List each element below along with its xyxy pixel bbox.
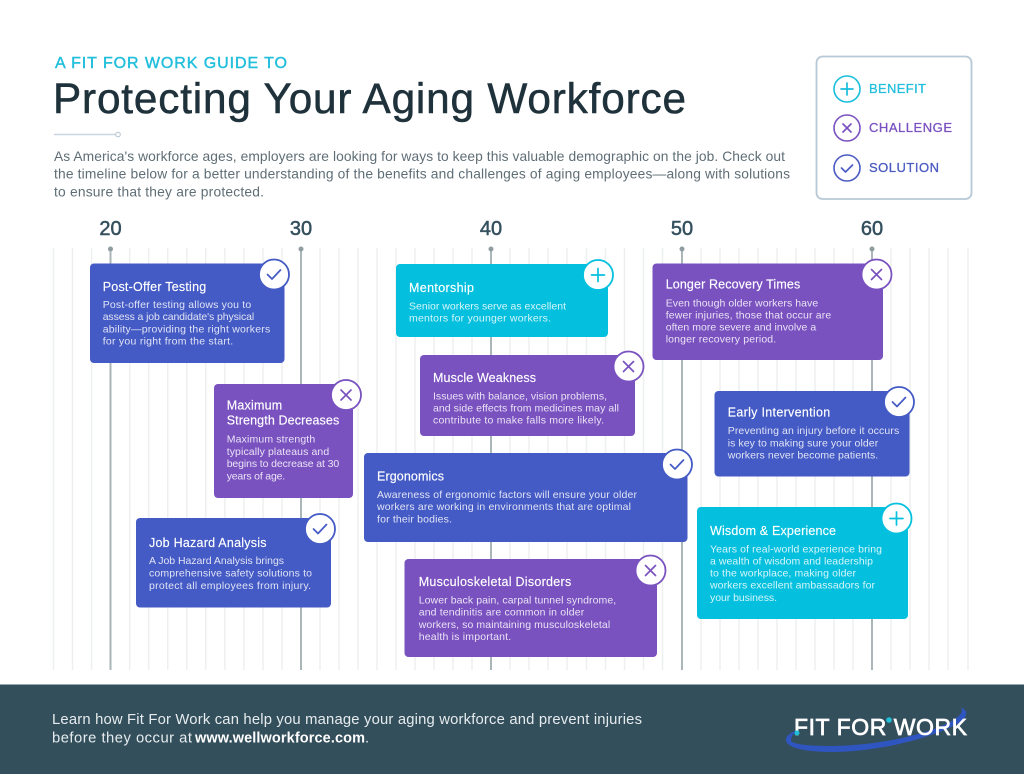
card: Ergonomics: Awareness of ergonomic factors will ensure your older <box>377 489 638 501</box>
timeline age labels: 20 <box>99 218 122 240</box>
intro text <box>54 149 790 200</box>
footer text: Learn how Fit For Work can help you manage your aging workforce and prevent injuries <box>52 712 642 728</box>
card: Longer Recovery Times: longer recovery period. <box>666 334 776 346</box>
card: Maximum Strength Decreases: Maximum strength <box>227 434 315 446</box>
card: Musculoskeletal Disorders <box>404 556 666 657</box>
card: Musculoskeletal Disorders: workers, so maintaining musculoskeletal <box>418 619 610 631</box>
card: Mentorship: Mentorship <box>409 281 474 295</box>
card: Mentorship: Senior workers serve as excellent <box>409 300 566 312</box>
icon: benefit plus <box>583 260 613 290</box>
icon: challenge x <box>331 380 361 410</box>
card: Post-Offer Testing: Post-Offer Testing <box>103 280 206 294</box>
card: Wisdom & Experience: workers excellent ambassadors for <box>709 580 876 592</box>
card: Longer Recovery Times: Even though older workers have <box>666 298 818 310</box>
card: Maximum Strength Decreases: Strength Decreases <box>227 414 339 428</box>
card: Post-Offer Testing: assess a job candidate's physical <box>103 311 254 323</box>
card: Maximum Strength Decreases: typically plateaus and <box>227 446 329 458</box>
subtitle: A FIT FOR WORK GUIDE TO <box>55 55 287 72</box>
card: Early Intervention <box>714 387 914 476</box>
card: Wisdom & Experience: to the workplace, making older <box>710 568 856 580</box>
timeline age labels: 60 <box>861 218 883 240</box>
card: Maximum Strength Decreases: Maximum <box>227 398 282 412</box>
card: Longer Recovery Times: Longer Recovery Times <box>666 278 800 292</box>
card: Longer Recovery Times: often more severe and involve a <box>666 322 816 334</box>
icon: solution check <box>884 387 914 417</box>
card: Job Hazard Analysis: A Job Hazard Analysis brings <box>149 555 284 567</box>
card: Musculoskeletal Disorders: Musculoskeletal Disorders <box>419 575 571 589</box>
legend: challenge: CHALLENGE <box>869 120 952 135</box>
legend <box>816 56 972 199</box>
card: Ergonomics: for their bodies. <box>377 514 452 526</box>
footer band <box>0 684 1024 774</box>
legend: challenge <box>834 115 952 141</box>
card: Musculoskeletal Disorders: Lower back pain, carpal tunnel syndrome, <box>419 594 616 606</box>
card: Muscle Weakness: Issues with balance, vision problems, <box>433 390 607 402</box>
card: Maximum Strength Decreases: years of age. <box>227 470 285 482</box>
timeline age labels <box>99 218 883 240</box>
card: Early Intervention: workers never become patients. <box>727 450 878 462</box>
footer text: before they occur at <box>52 730 192 746</box>
card: Musculoskeletal Disorders: and tendinitis are common in older <box>419 606 585 618</box>
footer text: www.wellworkforce.com <box>194 730 365 746</box>
card: Job Hazard Analysis: comprehensive safety solutions to <box>149 568 312 580</box>
intro text: As America's workforce ages, employers are looking for ways to keep this valuable demographic on the job. Check out <box>54 149 785 164</box>
legend: benefit: BENEFIT <box>869 81 926 96</box>
card: Longer Recovery Times: fewer injuries, those that occur are <box>666 310 831 322</box>
footer text: . <box>365 730 369 746</box>
card: Ergonomics: workers are working in environments that are optimal <box>376 501 631 513</box>
card: Muscle Weakness <box>420 352 644 436</box>
card: Maximum Strength Decreases <box>214 380 361 498</box>
card: Mentorship <box>396 260 613 337</box>
card: Post-Offer Testing: for you right from the start. <box>103 336 233 348</box>
card: Early Intervention: Preventing an injury before it occurs <box>728 425 899 437</box>
timeline age labels: 30 <box>290 218 312 240</box>
icon: solution check <box>662 450 692 480</box>
card: Muscle Weakness: contribute to make falls more likely. <box>433 414 604 426</box>
card: Early Intervention: is key to making sure your older <box>728 438 879 450</box>
icon: challenge x <box>862 260 892 290</box>
card: Post-Offer Testing: Post-offer testing allows you to <box>103 299 251 311</box>
logo: Fit For Work <box>786 708 968 752</box>
card: Early Intervention: Early Intervention <box>728 406 830 420</box>
card: Wisdom & Experience: Years of real-world experience bring <box>710 544 882 556</box>
card: Wisdom & Experience: Wisdom & Experience <box>710 524 836 538</box>
card: Job Hazard Analysis: protect all employees from injury. <box>149 580 311 592</box>
legend: benefit <box>834 76 926 102</box>
card: Muscle Weakness: Muscle Weakness <box>433 371 536 385</box>
legend: solution <box>834 155 939 181</box>
timeline age labels: 50 <box>671 218 693 240</box>
icon: challenge x <box>614 352 644 382</box>
card: Job Hazard Analysis: Job Hazard Analysis <box>149 536 266 550</box>
icon: benefit plus <box>882 504 912 534</box>
card: Wisdom & Experience: a wealth of wisdom and leadership <box>710 556 873 568</box>
card: Post-Offer Testing <box>90 260 289 363</box>
intro text: to ensure that they are protected. <box>54 184 264 200</box>
card: Mentorship: mentors for younger workers. <box>409 312 551 324</box>
icon: challenge x <box>636 556 666 586</box>
card: Longer Recovery Times <box>652 260 892 360</box>
card: Wisdom & Experience: your business. <box>710 592 777 604</box>
card: Maximum Strength Decreases: begins to decrease at 30 <box>227 458 339 470</box>
card: Ergonomics <box>364 450 692 542</box>
icon: solution check <box>305 514 335 544</box>
timeline age labels: 40 <box>480 218 502 240</box>
card: Wisdom & Experience <box>697 504 912 619</box>
logo: Fit For Work: FIT FOR WORK <box>794 714 968 740</box>
card: Musculoskeletal Disorders: health is important. <box>419 631 511 643</box>
card: Post-Offer Testing: ability—providing the right workers <box>103 324 270 336</box>
card: Ergonomics: Ergonomics <box>377 470 444 484</box>
card: Muscle Weakness: and side effects from medicines may all <box>433 402 619 414</box>
title divider <box>54 132 120 137</box>
card: Job Hazard Analysis <box>136 514 335 608</box>
intro text: the timeline below for a better understanding of the benefits and challenges of aging employees—along with solutions <box>54 166 790 182</box>
legend: solution: SOLUTION <box>869 160 939 175</box>
title: Protecting Your Aging Workforce <box>53 75 686 122</box>
icon: solution check <box>259 260 289 290</box>
timeline grid <box>54 246 968 670</box>
footer text <box>52 712 642 746</box>
